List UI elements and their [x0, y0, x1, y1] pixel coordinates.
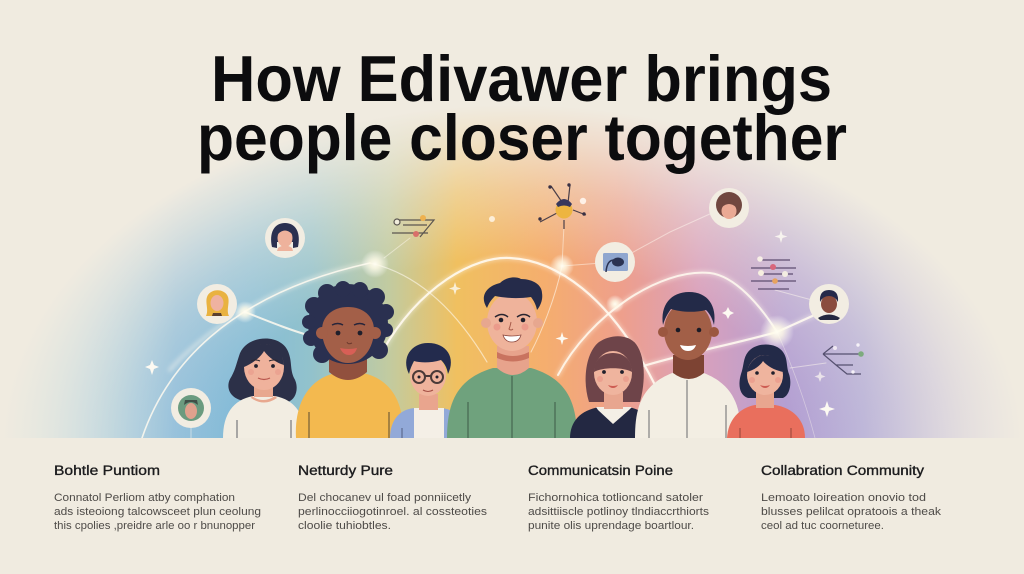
column: Communicatsin Poine: Communicatsin Poine	[528, 463, 673, 478]
column: Netturdy Pure: Netturdy Pure	[298, 463, 393, 478]
column: Collabration Community: blusses pelilcat opratoois a theak	[761, 506, 941, 518]
column: Collabration Community: ceol ad tuc coorneturee.	[761, 520, 884, 532]
column: Collabration Community	[761, 463, 941, 532]
column: Communicatsin Poine: adsittiiscle potlinoy tlndiaccrthiorts	[528, 506, 709, 518]
person 2: woman in yellow sweater	[296, 281, 403, 438]
person 1: woman in white sweater	[223, 338, 305, 438]
column: Bohtle Puntiom: Connatol Perliom atby comphation	[54, 492, 235, 504]
column: Bohtle Puntiom: this cpolies ,preidre arle oo r bnunopper	[54, 520, 255, 532]
icon: avatar dark man	[809, 284, 849, 324]
column: Collabration Community: Lemoato loireation onovio tod	[761, 492, 926, 504]
column: Communicatsin Poine: Fichornohica totlioncand satoler	[528, 492, 703, 504]
connection arcs	[142, 213, 830, 438]
glow nodes	[234, 198, 794, 349]
person 3: boy with glasses	[390, 343, 451, 438]
icon: branching arrow	[823, 343, 864, 374]
column: Bohtle Puntiom: ads isteoiong talcowsceet plun ceolung	[54, 506, 261, 518]
column: Communicatsin Poine	[528, 463, 709, 532]
column: Bohtle Puntiom: Bohtle Puntiom	[54, 463, 160, 478]
column: Netturdy Pure: Del chocanev ul foad ponniicetly	[298, 492, 471, 504]
person 4: man in green sweater	[447, 277, 577, 438]
column: Netturdy Pure	[298, 463, 487, 532]
icon: right slider diagram	[751, 256, 796, 289]
column: Netturdy Pure: perlinocciiogotinroel. al cossteoties	[298, 506, 487, 518]
person 5: woman in navy V sweater	[570, 336, 644, 438]
icon: avatar blonde	[197, 284, 237, 324]
icon: avatar woman	[265, 218, 305, 258]
icon: avatar green	[171, 388, 211, 428]
column: Bohtle Puntiom	[54, 463, 261, 532]
icon: network figure	[538, 183, 586, 229]
person 6: man in white jacket	[635, 292, 741, 438]
column: Communicatsin Poine: punite olis uprendage boartlour.	[528, 520, 694, 532]
title	[197, 42, 847, 174]
infographic	[33, 54, 984, 532]
title: How Edivawer brings	[211, 42, 832, 115]
rainbow gradient dome	[0, 100, 1024, 438]
sparkles	[145, 230, 835, 417]
icon: chat badge	[595, 242, 635, 282]
column: Netturdy Pure: cloolie tuhiobtles.	[298, 520, 391, 532]
person 7: woman in coral sweater	[727, 344, 805, 438]
people group	[223, 277, 805, 438]
icon: avatar curly	[709, 188, 749, 228]
title: people closer together	[197, 101, 847, 174]
column: Collabration Community: Collabration Community	[761, 463, 924, 478]
icon: left slider diagram	[392, 215, 434, 237]
